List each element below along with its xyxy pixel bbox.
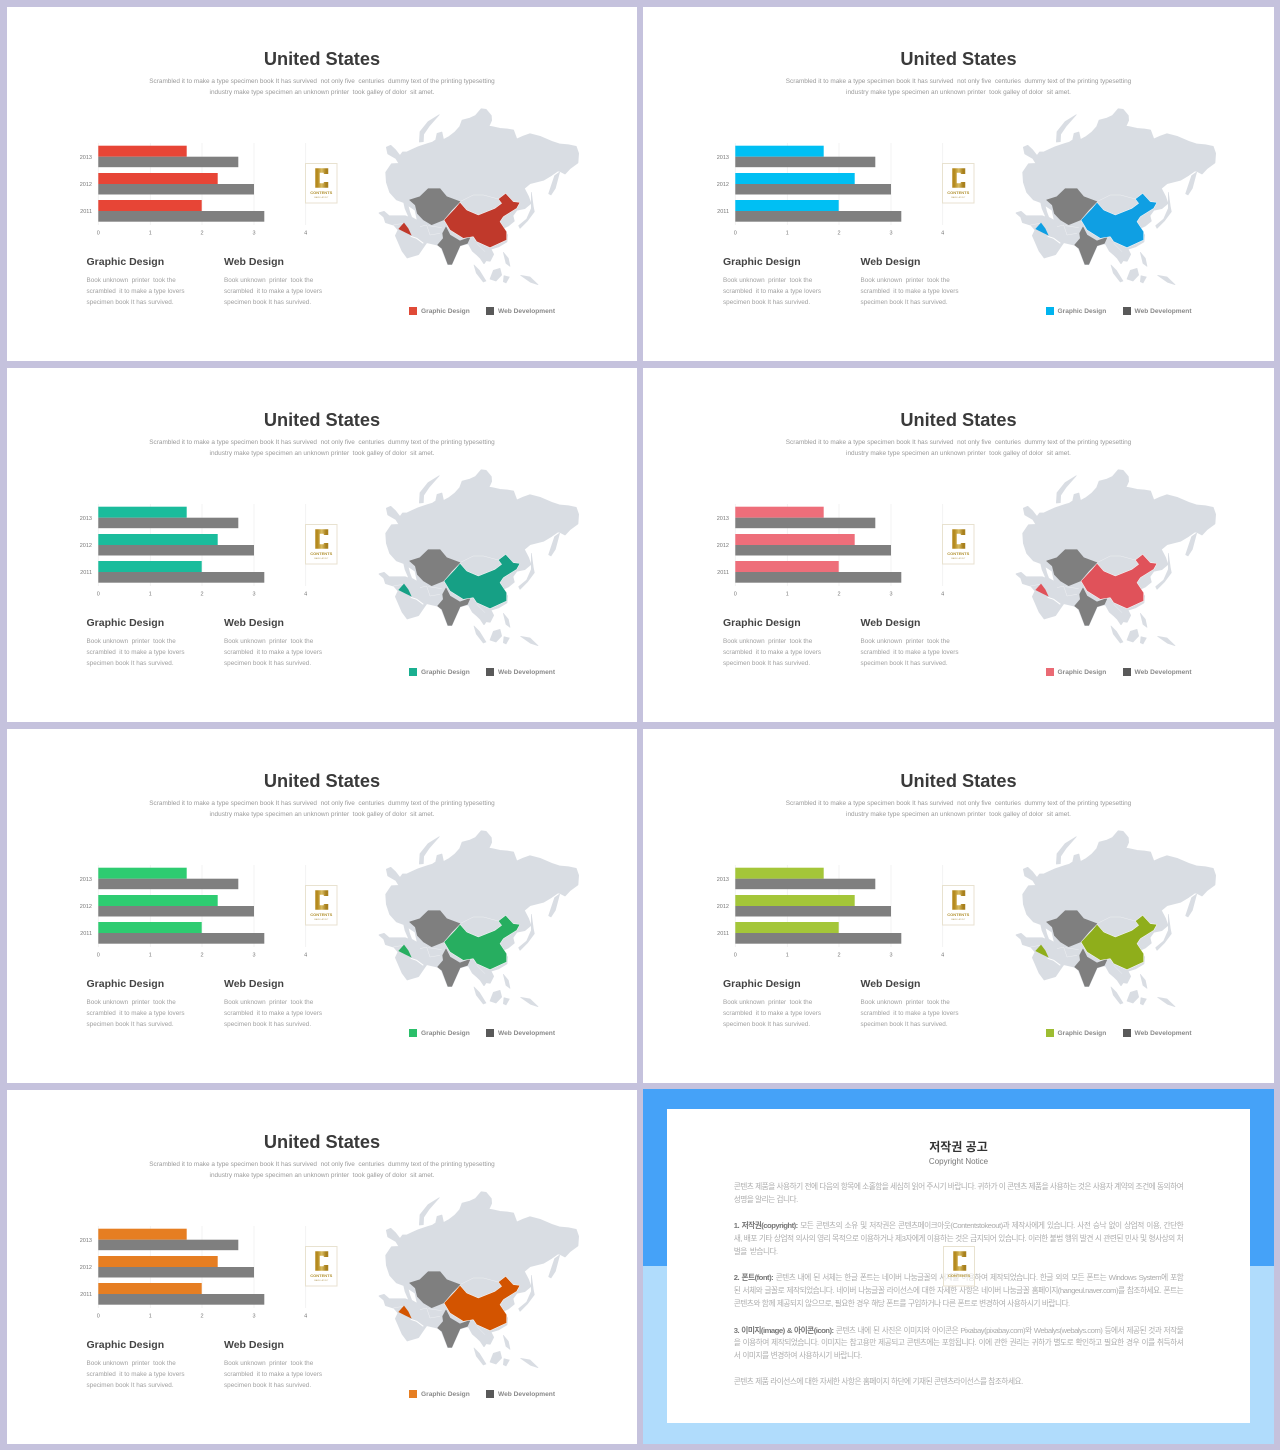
text: graphic design: Book unknown printer took the scrambled it to make a type lovers specimen book It has survived. <box>723 998 821 1028</box>
logo badge <box>943 1246 975 1286</box>
bar chart: 3 <box>889 592 892 598</box>
bar chart: 0 <box>97 952 100 958</box>
notice section 3: images and icons: 을 이용하여 제작되었습니다. 이미지는 참고용만 제공되고 콘텐츠에는 포함됩니다. 이에 관한 권리는 귀하가 별도로 확인하고 필요한 경우 이를 취득하셔 <box>734 1338 1183 1347</box>
legend label: web development: Web Development <box>498 668 555 676</box>
bar chart: 2 <box>837 952 840 958</box>
bar chart <box>716 865 944 958</box>
heading: web design: Web Design <box>224 616 284 628</box>
map <box>1016 830 1216 1007</box>
bar chart <box>80 143 307 236</box>
bar chart: 2011 <box>717 931 728 937</box>
legend label: web development: Web Development <box>1134 308 1192 314</box>
bar chart: 2012 <box>80 904 92 910</box>
subtitle: Scrambled it to make a type specimen book It has survived not only five centuries dummy text of the printing typesetting industry make type specimen an unknown printer took galley of dolor sit amet. <box>149 800 495 818</box>
bar chart: 2011 <box>80 209 92 215</box>
logo badge: MAKE LAYOUT <box>314 557 329 560</box>
notice section 2: font <box>734 1273 1184 1308</box>
bar chart: 0 <box>97 230 100 236</box>
bar chart: 2012 <box>716 543 728 549</box>
logo badge: CONTENTS <box>947 912 969 917</box>
bar chart: 4 <box>941 230 944 236</box>
panel: copyright notice <box>643 1089 1274 1444</box>
notice intro <box>734 1182 1183 1204</box>
logo badge: CONTENTS <box>947 190 969 195</box>
notice title: 저작권 공고 <box>929 1140 988 1154</box>
bar chart: 4 <box>941 952 944 958</box>
bar chart: 2011 <box>80 931 92 937</box>
subtitle: Scrambled it to make a type specimen book It has survived not only five centuries dummy text of the printing typesetting industry make type specimen an unknown printer took galley of dolor sit amet. <box>149 438 495 456</box>
subtitle: Scrambled it to make a type specimen book It has survived not only five centuries dummy text of the printing typesetting industry make type specimen an unknown printer took galley of dolor sit amet. <box>786 438 1131 456</box>
bar chart: 1 <box>149 952 152 958</box>
bar chart: 2 <box>200 592 204 598</box>
logo badge <box>942 163 974 204</box>
panel: red variant <box>7 7 637 361</box>
bar chart: 2013 <box>716 155 728 161</box>
bar chart: 4 <box>304 230 307 236</box>
bar chart: 2 <box>200 1314 204 1320</box>
legend label: web development: Web Development <box>498 1390 555 1398</box>
legend swatch: graphic design <box>1046 307 1054 315</box>
logo badge: MAKE LAYOUT <box>951 918 966 921</box>
heading: web design: Web Design <box>224 256 284 268</box>
notice section 1: copyright: 새, 배포 기타 상업적 의사의 영리 목적으로 이용하거나 제3자에게 이용하는 것은 금지되어 있습니다. 이러한 불법 행위 발견 시 관련된 민사 및 형사상의 처 <box>734 1234 1183 1242</box>
legend swatch: graphic design <box>409 1029 417 1037</box>
logo badge <box>942 524 974 564</box>
text: graphic design: Book unknown printer took the scrambled it to make a type lovers specimen book It has survived. <box>723 276 821 306</box>
text: web design: Book unknown printer took the scrambled it to make a type lovers specimen book It has survived. <box>224 276 322 306</box>
text: web design: Book unknown printer took the scrambled it to make a type lovers specimen book It has survived. <box>860 276 959 306</box>
heading: web design: Web Design <box>224 1338 284 1350</box>
logo badge: MAKE LAYOUT <box>951 557 966 560</box>
text: graphic design: Book unknown printer took the scrambled it to make a type lovers specimen book It has survived. <box>86 998 185 1028</box>
legend swatch: web development <box>1122 668 1130 676</box>
bar chart: 3 <box>252 230 256 236</box>
legend swatch: web development <box>1122 1029 1130 1037</box>
notice section 2: font: 된 서체와 글꼴로 제작되었습니다. 네이버 나눔글꼴 라이선스에 대한 자세한 사항은 네이버 나눔글꼴 홈페이지(hangeul.naver.com)를 참조하세요. 폰트는 <box>734 1286 1183 1295</box>
heading: web design: Web Design <box>860 256 920 268</box>
legend label: web development: Web Development <box>1134 1030 1192 1036</box>
logo badge <box>305 1246 338 1286</box>
logo badge: CONTENTS <box>310 912 333 917</box>
notice intro: 성명을 알리는 겁니다. <box>734 1194 798 1204</box>
legend label: graphic design: Graphic Design <box>421 668 470 676</box>
panel: coral variant <box>643 368 1274 722</box>
bar chart: 2011 <box>717 570 728 576</box>
bar chart: 1 <box>785 230 788 236</box>
title: United States <box>900 49 1017 69</box>
bar chart: 0 <box>733 952 736 958</box>
bar chart <box>80 504 307 598</box>
bar chart: 1 <box>149 592 152 598</box>
legend swatch: web development <box>486 1029 494 1037</box>
panel: green variant <box>7 729 637 1083</box>
bar chart: 4 <box>304 952 307 958</box>
bar chart: 2013 <box>80 1238 92 1244</box>
bar chart: 2013 <box>716 516 728 522</box>
legend swatch: web development <box>486 307 494 315</box>
bar chart: 2 <box>200 952 204 958</box>
heading: web design: Web Design <box>224 978 284 990</box>
bar chart: 2011 <box>80 1292 92 1298</box>
title: United States <box>264 771 380 791</box>
bar chart: 0 <box>733 230 736 236</box>
notice section 2: font: 2. 폰트(font): 콘텐츠 내에 된 서체는 한글 폰트는 네이버 나눔글꼴의 서체를 이용하여 제작되었습니다. 한글 외의 모든 폰트는 Windows System에 포함 <box>734 1273 1183 1282</box>
panel: teal variant <box>7 368 637 722</box>
bar chart: 2012 <box>80 543 92 549</box>
bar chart: 4 <box>941 592 944 598</box>
text: web design: Book unknown printer took the scrambled it to make a type lovers specimen book It has survived. <box>224 998 322 1028</box>
bar chart: 3 <box>889 230 892 236</box>
legend swatch: graphic design <box>409 1390 417 1398</box>
notice section 3: images and icons: 3. 이미지(image) & 아이콘(icon): 콘텐츠 내에 된 사진은 이미지와 아이콘은 Pixabay(pixabay.com)와 Webalys(webalys.com) 등에서 제공된 것과 저작물 <box>734 1326 1183 1334</box>
legend label: graphic design: Graphic Design <box>421 308 470 314</box>
bar chart: 1 <box>149 230 152 236</box>
bar chart <box>716 143 944 236</box>
bar chart: 0 <box>97 1314 100 1320</box>
bar chart: 2011 <box>717 209 728 215</box>
blue header band <box>643 1089 1274 1266</box>
notice section 1: copyright <box>734 1221 1184 1256</box>
bar chart: 1 <box>785 952 788 958</box>
map <box>1016 470 1216 646</box>
legend swatch: web development <box>486 1390 494 1398</box>
map <box>378 1192 579 1368</box>
notice section 2: font: 콘텐츠와 함께 제공되지 않으므로, 필요한 경우 해당 폰트를 구입하거나 다른 폰트로 변경하여 사용하시기 바랍니다. <box>734 1298 1070 1308</box>
text: web design: Book unknown printer took the scrambled it to make a type lovers specimen book It has survived. <box>224 1360 322 1388</box>
map <box>1016 108 1216 285</box>
legend label: graphic design: Graphic Design <box>421 1030 470 1036</box>
bar chart <box>80 1226 307 1320</box>
logo badge: MAKE LAYOUT <box>314 196 329 199</box>
title: United States <box>264 49 380 69</box>
panel: blue variant <box>643 7 1274 361</box>
map <box>378 108 579 285</box>
legend swatch: graphic design <box>409 307 417 315</box>
logo badge: CONTENTS <box>948 1273 970 1278</box>
notice section 1: copyright: 벌을 받습니다. <box>734 1247 778 1256</box>
legend swatch: graphic design <box>409 668 417 676</box>
bar chart <box>716 504 944 598</box>
logo badge <box>305 524 338 564</box>
bar chart: 0 <box>97 592 100 598</box>
bar chart: 4 <box>304 1314 307 1320</box>
subtitle: Scrambled it to make a type specimen book It has survived not only five centuries dummy text of the printing typesetting industry make type specimen an unknown printer took galley of dolor sit amet. <box>786 78 1131 96</box>
title: United States <box>900 410 1017 430</box>
legend label: graphic design: Graphic Design <box>421 1390 470 1398</box>
notice section 3: images and icons: 서 이미지를 변경하여 사용하시기 바랍니다. <box>734 1351 862 1360</box>
legend label: graphic design: Graphic Design <box>1058 308 1106 314</box>
logo badge: CONTENTS <box>947 551 969 556</box>
logo badge: MAKE LAYOUT <box>314 1279 329 1282</box>
legend label: web development: Web Development <box>498 308 555 314</box>
bar chart: 2013 <box>80 516 92 522</box>
bar chart: 2011 <box>80 570 92 576</box>
bar chart: 1 <box>785 592 788 598</box>
heading: graphic design: Graphic Design <box>723 616 801 628</box>
legend swatch: web development <box>486 668 494 676</box>
bar chart: 2013 <box>716 877 728 883</box>
map <box>378 830 579 1007</box>
notice intro: 콘텐츠 제품을 사용하기 전에 다음의 항목에 소홀함을 세심히 읽어 주시기 바랍니다. 귀하가 이 콘텐츠 제품을 사용하는 것은 사용자 계약의 조건에 동의하여 <box>734 1182 1183 1191</box>
bar chart: 3 <box>252 952 256 958</box>
subtitle: Scrambled it to make a type specimen book It has survived not only five centuries dummy text of the printing typesetting industry make type specimen an unknown printer took galley of dolor sit amet. <box>786 800 1131 818</box>
bar chart: 2012 <box>716 182 728 188</box>
title: United States <box>264 1132 380 1152</box>
subtitle: Scrambled it to make a type specimen book It has survived not only five centuries dummy text of the printing typesetting industry make type specimen an unknown printer took galley of dolor sit amet. <box>149 1160 495 1178</box>
bar chart: 2013 <box>80 155 92 161</box>
panel: orange variant <box>7 1090 637 1444</box>
logo badge: MAKE LAYOUT <box>314 918 329 921</box>
notice section 3: images and icons <box>734 1326 1184 1360</box>
legend swatch: graphic design <box>1046 1029 1054 1037</box>
text: web design: Book unknown printer took the scrambled it to make a type lovers specimen book It has survived. <box>224 638 322 666</box>
bar chart: 3 <box>252 1314 256 1320</box>
logo badge <box>305 163 338 204</box>
logo badge <box>942 885 974 926</box>
notice section 1: copyright: 1. 저작권(copyright): 모든 콘텐츠의 소유 및 저작권은 콘텐츠메이크아웃(Contentstokeout)과 제작사에게 있습니다. 사전 승낙 없이 상업적 이용, 간단한 <box>734 1221 1183 1230</box>
heading: web design: Web Design <box>860 616 920 628</box>
bar chart: 2012 <box>80 1265 92 1271</box>
notice subtitle: Copyright Notice <box>929 1157 988 1166</box>
title: United States <box>900 771 1017 791</box>
heading: graphic design: Graphic Design <box>86 978 164 990</box>
bar chart: 2013 <box>80 877 92 883</box>
bar chart <box>80 865 307 958</box>
bar chart: 2012 <box>716 904 728 910</box>
bar chart: 2 <box>200 230 204 236</box>
logo badge: CONTENTS <box>310 1273 333 1278</box>
bar chart: 2 <box>837 592 840 598</box>
subtitle: Scrambled it to make a type specimen book It has survived not only five centuries dummy text of the printing typesetting industry make type specimen an unknown printer took galley of dolor sit amet. <box>149 78 495 96</box>
legend swatch: web development <box>1122 307 1130 315</box>
white notice card <box>667 1109 1250 1423</box>
text: graphic design: Book unknown printer took the scrambled it to make a type lovers specimen book It has survived. <box>86 1360 185 1388</box>
heading: graphic design: Graphic Design <box>86 1338 164 1350</box>
heading: web design: Web Design <box>860 978 920 990</box>
bar chart: 2 <box>837 230 840 236</box>
heading: graphic design: Graphic Design <box>86 256 164 268</box>
legend label: graphic design: Graphic Design <box>1058 1030 1106 1036</box>
text: graphic design: Book unknown printer took the scrambled it to make a type lovers specimen book It has survived. <box>86 276 185 306</box>
bar chart: 0 <box>733 592 736 598</box>
heading: graphic design: Graphic Design <box>723 256 801 268</box>
legend label: graphic design: Graphic Design <box>1058 668 1106 676</box>
title: United States <box>264 410 380 430</box>
text: web design: Book unknown printer took the scrambled it to make a type lovers specimen book It has survived. <box>860 998 959 1028</box>
legend label: web development: Web Development <box>1134 668 1192 676</box>
notice footer line: 콘텐츠 제품 라이선스에 대한 자세한 사항은 홈페이지 하단에 기재된 콘텐츠라이선스를 참조하세요. <box>734 1376 1023 1386</box>
legend label: web development: Web Development <box>498 1030 555 1036</box>
heading: graphic design: Graphic Design <box>86 616 164 628</box>
text: graphic design: Book unknown printer took the scrambled it to make a type lovers specimen book It has survived. <box>86 638 185 666</box>
text: graphic design: Book unknown printer took the scrambled it to make a type lovers specimen book It has survived. <box>723 638 821 666</box>
text: web design: Book unknown printer took the scrambled it to make a type lovers specimen book It has survived. <box>860 638 959 666</box>
bar chart: 2012 <box>80 182 92 188</box>
bar chart: 1 <box>149 1314 152 1320</box>
logo badge <box>305 885 338 926</box>
logo badge: CONTENTS <box>310 190 333 195</box>
legend swatch: graphic design <box>1046 668 1054 676</box>
bar chart: 3 <box>889 952 892 958</box>
heading: graphic design: Graphic Design <box>723 978 801 990</box>
bar chart: 3 <box>252 592 256 598</box>
bar chart: 4 <box>304 592 307 598</box>
logo badge: MAKE LAYOUT <box>951 196 966 199</box>
map <box>378 470 579 646</box>
logo badge: CONTENTS <box>310 551 333 556</box>
panel: lime variant <box>643 729 1274 1083</box>
